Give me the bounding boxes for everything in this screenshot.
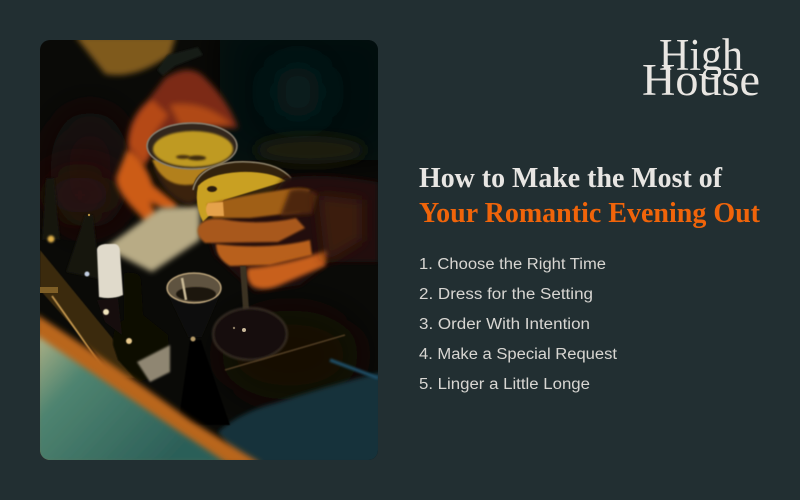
numbered list: 3. Order With Intention (419, 316, 590, 333)
metal jigger (167, 273, 230, 425)
heading: Your Romantic Evening Out (419, 197, 760, 229)
logo: High House (642, 30, 760, 105)
front cocktail glass (193, 162, 292, 225)
heading (419, 162, 760, 229)
numbered list: 5. Linger a Little Longe (419, 376, 590, 393)
white napkin (105, 206, 200, 272)
dish towel (218, 372, 382, 464)
panel: cocktail photo (40, 40, 378, 460)
logo: High House: High (659, 30, 743, 80)
logo: High House: House (642, 55, 760, 105)
rear arm and hand (116, 70, 238, 228)
numbered list: 4. Make a Special Request (419, 346, 618, 363)
bottles at left (43, 178, 98, 278)
numbered list: 1. Choose the Right Time (419, 256, 606, 273)
numbered list: 2. Dress for the Setting (419, 286, 593, 303)
green counter with orange edge (36, 314, 262, 464)
numbered list (419, 256, 618, 393)
tray edge (40, 250, 145, 378)
background tones (40, 40, 378, 386)
rear cocktail glass (147, 123, 237, 205)
watch strap (157, 47, 203, 76)
cream shirt at top (75, 36, 176, 75)
front hand (198, 176, 378, 292)
infographic canvas (40, 38, 760, 460)
wine glass stem and foot (213, 266, 345, 370)
heading: How to Make the Most of (419, 162, 722, 194)
spray bottle (97, 244, 170, 382)
